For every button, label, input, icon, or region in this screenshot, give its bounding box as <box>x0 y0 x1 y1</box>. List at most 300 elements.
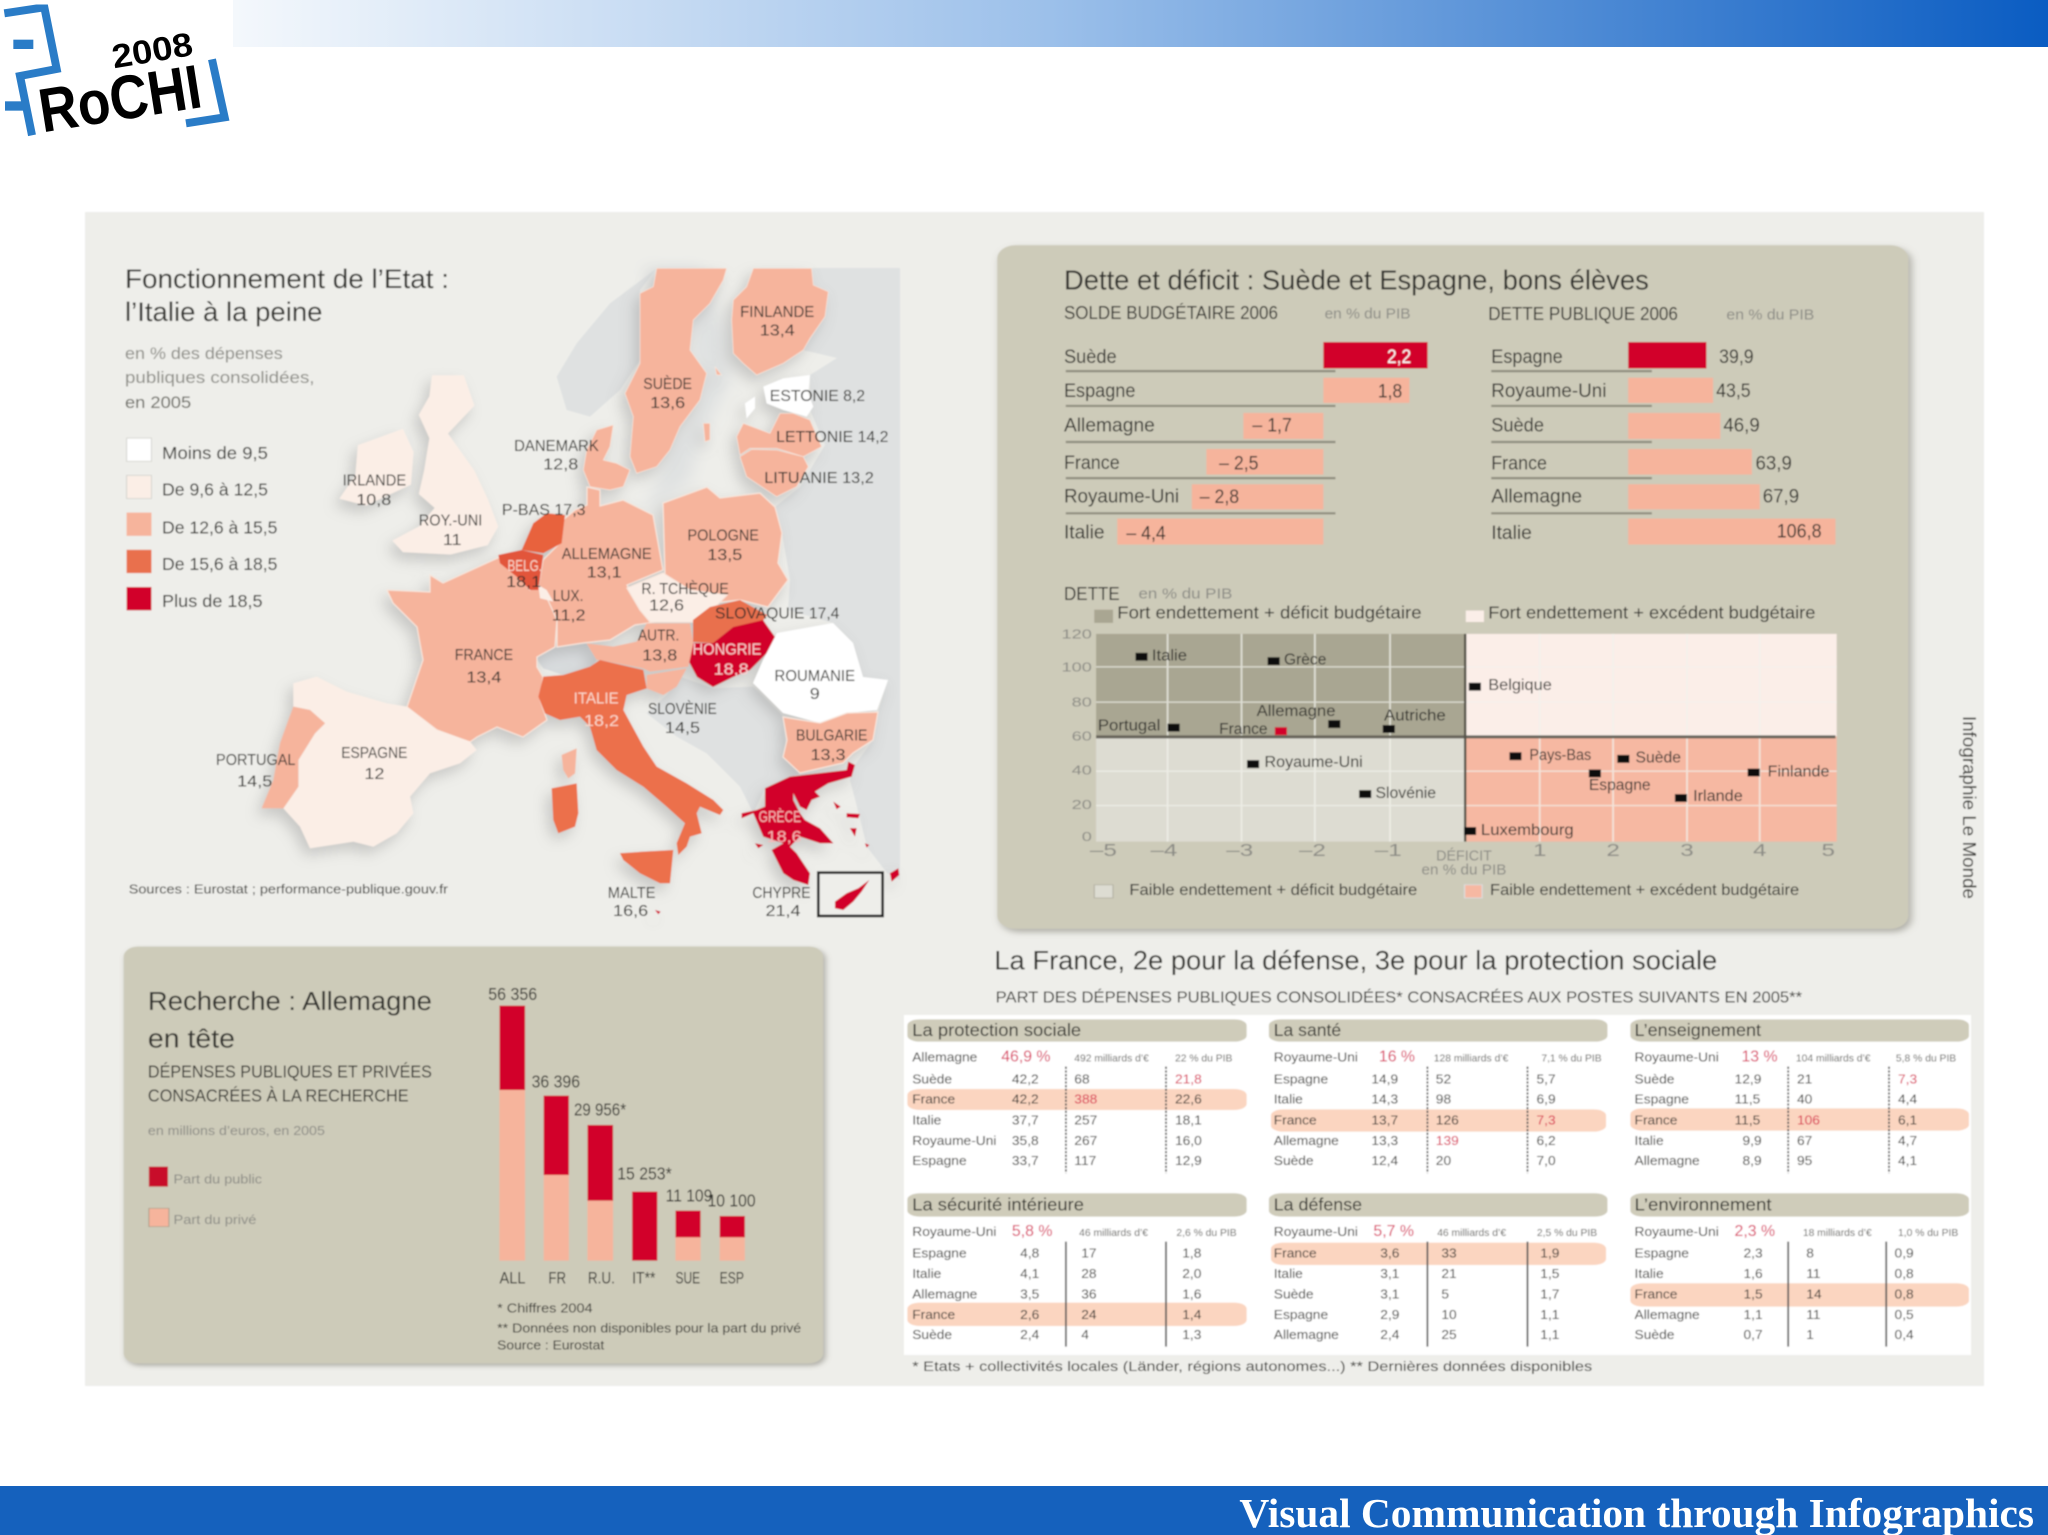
table: La protection sociale: 33,7 <box>1012 1153 1039 1168</box>
scatter plot: dette et déficit: –5 <box>1090 841 1117 860</box>
map legend: De 15,6 à 18,5 <box>162 555 277 575</box>
table: La santé <box>1269 1019 1607 1168</box>
map: country labels: ESPAGNE <box>341 744 407 762</box>
stacked bar chart: research spending: FR <box>548 1269 566 1287</box>
table: L'environnement: 11 <box>1806 1266 1821 1281</box>
table: L'environnement: 0,7 <box>1744 1327 1763 1342</box>
map: country labels: 13,6 <box>650 394 685 412</box>
bar chart: solde budgétaire: – 2,8 <box>1200 486 1239 507</box>
table: La sécurité intérieure: 36 <box>1081 1287 1097 1301</box>
table: L'enseignement: 13 % <box>1741 1049 1778 1066</box>
scatter plot: dette et déficit: Luxembourg <box>1481 822 1574 839</box>
map: country labels: 9 <box>810 685 820 703</box>
scatter plot: dette et déficit: Finlande <box>1768 763 1829 781</box>
map subtitle: publiques consolidées, <box>125 368 315 387</box>
map: country labels: 11 <box>443 531 462 549</box>
scatter plot: dette et déficit: DETTE <box>1064 583 1120 604</box>
table: La santé: Allemagne <box>1274 1133 1339 1148</box>
table: La défense: 1,7 <box>1540 1287 1559 1301</box>
map: country labels: 11,2 <box>552 607 585 624</box>
table: La santé: Italie <box>1274 1092 1303 1106</box>
table: L'enseignement: 4,7 <box>1898 1133 1917 1148</box>
research legend: Part du public <box>174 1172 262 1187</box>
map: country labels: ROUMANIE <box>775 667 855 685</box>
table: La défense: 1,1 <box>1540 1307 1559 1322</box>
table: La défense: 2,5 % du PIB <box>1537 1228 1597 1239</box>
table: La défense: 1,1 <box>1540 1327 1559 1342</box>
table: La protection sociale: 12,9 <box>1175 1153 1202 1168</box>
logo: RoCHI 2008 <box>4 7 225 146</box>
research heading: en tête <box>148 1023 235 1053</box>
table: L'enseignement: 95 <box>1797 1153 1812 1168</box>
table: L'enseignement: 12,9 <box>1735 1072 1761 1086</box>
table: La protection sociale: Espagne <box>912 1153 967 1168</box>
table: L'environnement: 1,5 <box>1744 1287 1763 1301</box>
map: country labels: 13,5 <box>707 546 742 564</box>
table: La protection sociale: France <box>912 1092 955 1106</box>
Iberia <box>262 677 477 848</box>
research legend <box>149 1167 262 1227</box>
table: L'environnement <box>1630 1193 1969 1342</box>
bar chart: dette publique: DETTE PUBLIQUE 2006 <box>1488 303 1678 324</box>
table: L'environnement: 2,3 % <box>1735 1223 1775 1240</box>
table: L'environnement: Royaume-Uni <box>1635 1224 1719 1239</box>
table: La santé: 98 <box>1436 1092 1451 1106</box>
infographic background page <box>85 212 1984 1386</box>
table: La santé: France <box>1274 1113 1317 1127</box>
table: L'environnement: 0,8 <box>1895 1287 1914 1301</box>
table: La sécurité intérieure: Allemagne <box>912 1287 977 1301</box>
map subtitle <box>125 344 315 412</box>
table: L'enseignement: 67 <box>1797 1133 1812 1148</box>
map: country labels: LUX. <box>553 587 583 605</box>
scatter plot: dette et déficit: 5 <box>1821 841 1835 860</box>
table: La santé: 14,3 <box>1371 1092 1398 1106</box>
scatter plot: dette et déficit: Fort endettement + déficit budgétaire <box>1117 604 1422 623</box>
table: L'environnement: 0,4 <box>1895 1327 1914 1342</box>
table: L'enseignement: 21 <box>1797 1072 1812 1086</box>
map legend <box>127 438 277 612</box>
UK and Ireland <box>339 375 498 554</box>
table: L'environnement: 8 <box>1806 1246 1814 1260</box>
map: country labels: 12,6 <box>649 596 684 614</box>
map subtitle: en 2005 <box>125 393 191 412</box>
table: La défense: 10 <box>1441 1307 1457 1322</box>
table: La protection sociale: 35,8 <box>1012 1133 1039 1148</box>
research notes: Source : Eurostat <box>497 1339 605 1353</box>
table: L'enseignement: Allemagne <box>1635 1153 1700 1168</box>
table: L'environnement: 11 <box>1806 1307 1821 1322</box>
table: La défense: 2,4 <box>1380 1327 1400 1342</box>
table: L'environnement: Italie <box>1635 1266 1664 1281</box>
table: La sécurité intérieure: Italie <box>912 1266 941 1281</box>
bar chart: dette publique: Suède <box>1491 414 1544 436</box>
scatter plot: dette et déficit: 1 <box>1533 841 1546 860</box>
research heading: Recherche : Allemagne <box>148 986 432 1016</box>
table: La protection sociale: Allemagne <box>912 1050 977 1065</box>
scatter plot: dette et déficit: 40 <box>1072 764 1092 778</box>
map subtitle: en % des dépenses <box>125 344 283 363</box>
table: La sécurité intérieure: 24 <box>1081 1307 1097 1322</box>
map: country labels: ITALIE <box>574 689 619 707</box>
table: L'enseignement: Italie <box>1635 1133 1664 1148</box>
scatter plot: dette et déficit: DÉFICIT <box>1436 847 1492 864</box>
stacked bar chart: research spending: 56 356 <box>488 985 537 1004</box>
research subtitle: en millions d’euros, en 2005 <box>148 1124 325 1138</box>
scatter plot: dette et déficit: Portugal <box>1098 717 1160 735</box>
map: country labels: 18,6 <box>767 828 802 846</box>
table: La défense: Royaume-Uni <box>1274 1224 1358 1239</box>
table: L'enseignement: 4,1 <box>1898 1153 1917 1168</box>
map: country labels: 13,3 <box>811 746 846 764</box>
table: La défense: Italie <box>1274 1266 1303 1281</box>
table: La santé: 6,2 <box>1537 1133 1556 1148</box>
table: L'enseignement: 5,8 % du PIB <box>1896 1054 1956 1065</box>
table: La sécurité intérieure: 4,8 <box>1020 1246 1039 1260</box>
research notes: * Chiffres 2004 <box>497 1302 593 1316</box>
table: La protection sociale: 117 <box>1074 1153 1096 1168</box>
bar chart: solde budgétaire: Royaume-Uni <box>1064 485 1179 506</box>
map: country labels: P-BAS 17,3 <box>502 501 586 519</box>
scatter plot: dette et déficit: 120 <box>1061 627 1092 642</box>
table: La défense: 21 <box>1441 1266 1457 1281</box>
table: La santé: Royaume-Uni <box>1274 1050 1358 1065</box>
table: L'environnement: 0,8 <box>1895 1266 1914 1281</box>
table: La sécurité intérieure: La sécurité intérieure <box>912 1195 1084 1215</box>
scatter plot: dette et déficit: Belgique <box>1488 677 1552 694</box>
bar chart: dette publique: 106,8 <box>1777 520 1822 542</box>
stacked bar chart: research spending <box>488 985 756 1287</box>
scatter plot: dette et déficit: 80 <box>1072 696 1092 710</box>
research legend: Part du privé <box>174 1212 256 1227</box>
countries centre <box>387 487 888 773</box>
map: country labels: PORTUGAL <box>216 751 295 769</box>
map: country labels: CHYPRE <box>752 884 811 902</box>
map: country labels: 13,4 <box>466 668 501 686</box>
stacked bar chart: research spending: 36 396 <box>532 1073 580 1092</box>
table: La sécurité intérieure: 1,4 <box>1182 1307 1202 1322</box>
table: La protection sociale: 18,1 <box>1175 1113 1202 1127</box>
research subtitle <box>148 1063 432 1138</box>
table: La santé: 139 <box>1436 1133 1459 1148</box>
table: L'environnement: Espagne <box>1635 1246 1689 1260</box>
table: La défense: 3,1 <box>1380 1287 1399 1301</box>
table: La protection sociale: 37,7 <box>1012 1113 1039 1127</box>
bar chart: solde budgétaire: Espagne <box>1064 380 1135 401</box>
table: La sécurité intérieure: 4 <box>1081 1327 1089 1342</box>
bar chart: solde budgétaire: 1,8 <box>1378 380 1402 402</box>
bar chart: dette publique: Royaume-Uni <box>1491 380 1606 401</box>
stacked bar chart: research spending: R.U. <box>588 1269 615 1287</box>
map legend: De 9,6 à 12,5 <box>162 480 268 500</box>
table: La protection sociale <box>907 1019 1247 1168</box>
table: La protection sociale: 492 milliards d’€ <box>1074 1054 1149 1065</box>
table: La santé: 7,1 % du PIB <box>1541 1054 1602 1065</box>
bar chart: solde budgétaire: France <box>1064 451 1120 473</box>
table: L'enseignement: 104 milliards d’€ <box>1796 1054 1871 1065</box>
stacked bar chart: research spending: SUE <box>675 1269 700 1287</box>
footer title: Visual Communication through Infographics <box>1239 1490 2034 1535</box>
map: country labels: FRANCE <box>455 646 513 664</box>
bar chart: solde budgétaire: – 2,5 <box>1219 452 1259 474</box>
table: La santé: 13,3 <box>1371 1133 1398 1148</box>
stacked bar chart: research spending: ESP <box>720 1269 744 1287</box>
map legend: De 12,6 à 15,5 <box>162 519 277 538</box>
table: La protection sociale: 22,6 <box>1175 1092 1202 1106</box>
table: La sécurité intérieure: 2,6 <box>1020 1307 1039 1322</box>
table: La sécurité intérieure: France <box>912 1307 955 1322</box>
table: L'environnement: 1,1 <box>1744 1307 1763 1322</box>
table: La protection sociale: 21,8 <box>1175 1072 1202 1086</box>
table: La protection sociale: 68 <box>1074 1072 1090 1086</box>
map: country labels: ALLEMAGNE <box>562 545 652 563</box>
table: La défense: 1,9 <box>1540 1246 1559 1260</box>
table: La protection sociale: 46,9 % <box>1001 1049 1051 1066</box>
table: La défense: La défense <box>1274 1195 1362 1215</box>
table: La santé: 128 milliards d’€ <box>1434 1054 1509 1065</box>
research subtitle: DÉPENSES PUBLIQUES ET PRIVÉES <box>148 1063 432 1081</box>
table: L'enseignement <box>1630 1019 1969 1168</box>
bar chart: solde budgétaire: – 4,4 <box>1126 522 1166 543</box>
map: country labels: 13,8 <box>642 647 677 664</box>
table: La santé: 12,4 <box>1371 1153 1399 1168</box>
table: L'enseignement: 4,4 <box>1898 1092 1918 1106</box>
table: L'environnement: France <box>1635 1287 1677 1301</box>
top gradient band <box>233 0 2048 47</box>
table: La santé: 7,3 <box>1537 1113 1556 1127</box>
bar chart: solde budgétaire: SOLDE BUDGÉTAIRE 2006 <box>1064 303 1278 323</box>
table: La santé: La santé <box>1274 1020 1341 1040</box>
Italy, Austria, Slovenia, Greece <box>538 623 899 914</box>
table: La protection sociale: La protection sociale <box>912 1020 1081 1040</box>
table: L'enseignement: 7,3 <box>1898 1072 1917 1086</box>
scatter plot: dette et déficit: Autriche <box>1384 707 1446 725</box>
stacked bar chart: research spending: 15 253* <box>617 1164 672 1183</box>
map: country labels: FINLANDE <box>740 303 814 321</box>
map: country labels: 14,5 <box>237 772 272 790</box>
map: Cyprus inset <box>818 873 883 916</box>
table: La défense: Espagne <box>1274 1307 1328 1322</box>
scatter plot: dette et déficit: –3 <box>1226 841 1253 860</box>
panel: Dette et déficit <box>997 245 1908 929</box>
table: La défense: 3,1 <box>1380 1266 1399 1281</box>
table: La défense <box>1269 1193 1607 1342</box>
table: La sécurité intérieure: Espagne <box>912 1246 967 1260</box>
table: La santé: 13,7 <box>1371 1113 1398 1127</box>
table: La protection sociale: 16,0 <box>1175 1133 1202 1148</box>
map: country labels: 18,8 <box>714 661 749 678</box>
table: La défense: 2,9 <box>1380 1307 1399 1322</box>
map: country labels: HONGRIE <box>693 641 761 658</box>
scatter plot: dette et déficit: en % du PIB <box>1422 861 1506 878</box>
stacked bar chart: research spending: 11 109 <box>666 1187 712 1206</box>
table: La santé: Espagne <box>1274 1072 1328 1086</box>
table: La défense: 1,5 <box>1540 1266 1559 1281</box>
research notes <box>497 1302 801 1353</box>
table: La santé: 20 <box>1436 1153 1451 1168</box>
scatter plot: dette et déficit: Allemagne <box>1257 703 1335 720</box>
scatter plot: dette et déficit: 20 <box>1072 798 1092 812</box>
scatter plot: dette et déficit <box>1061 583 1837 899</box>
map sources: Sources : Eurostat ; performance-publique.gouv.fr <box>129 881 448 896</box>
map: country labels: ESTONIE 8,2 <box>770 387 865 405</box>
map text layer (heading, legend, labels) <box>125 265 888 920</box>
table: L'environnement: 2,3 <box>1744 1246 1763 1260</box>
table: L'enseignement: 6,1 <box>1898 1113 1917 1127</box>
table: La santé: 16 % <box>1379 1049 1415 1066</box>
table: La protection sociale: 267 <box>1074 1133 1097 1148</box>
table: La sécurité intérieure: Royaume-Uni <box>912 1224 996 1239</box>
panel: Recherche <box>124 947 823 1363</box>
bar chart: solde budgétaire: – 1,7 <box>1252 414 1292 436</box>
map: EU countries <box>262 268 899 914</box>
table: L'enseignement: France <box>1635 1113 1677 1127</box>
table: La protection sociale: Italie <box>912 1113 941 1127</box>
map: country labels: LITUANIE 13,2 <box>764 469 874 487</box>
map legend: Moins de 9,5 <box>162 444 268 464</box>
table: La défense: Allemagne <box>1274 1327 1339 1342</box>
bar chart: dette publique: 63,9 <box>1756 452 1792 473</box>
table: L'environnement: 1 <box>1806 1327 1814 1342</box>
table: La sécurité intérieure: 3,5 <box>1020 1287 1039 1301</box>
bar chart: solde budgétaire: Suède <box>1064 346 1117 367</box>
table: L'enseignement: Royaume-Uni <box>1635 1050 1719 1065</box>
scatter plot: dette et déficit: Grèce <box>1284 651 1326 669</box>
table: La santé: 14,9 <box>1371 1072 1398 1086</box>
bar chart: dette publique: France <box>1491 452 1547 473</box>
stacked bar chart: research spending: IT** <box>632 1269 656 1287</box>
map: country labels: BULGARIE <box>796 727 867 744</box>
scatter plot: dette et déficit: 4 <box>1753 841 1767 860</box>
map: country labels: 21,4 <box>766 902 801 920</box>
debt heading: Dette et déficit : Suède et Espagne, bons élèves <box>1064 264 1649 296</box>
map: country labels: 13,4 <box>760 322 795 339</box>
bar chart: dette publique: 67,9 <box>1763 485 1799 507</box>
table: La protection sociale: 257 <box>1074 1113 1097 1127</box>
scatter plot: dette et déficit: Espagne <box>1589 777 1651 794</box>
table: La défense: France <box>1274 1246 1317 1260</box>
table: La sécurité intérieure: 46 milliards d’€ <box>1079 1228 1148 1239</box>
bar chart: dette publique: 46,9 <box>1723 414 1760 436</box>
table: La santé: 7,0 <box>1537 1153 1556 1168</box>
logo: RoCHI 2008: 2008 <box>109 26 196 76</box>
table: La santé: 126 <box>1436 1113 1459 1127</box>
table: La santé: 5,7 <box>1537 1072 1556 1086</box>
scatter plot: dette et déficit: 2 <box>1606 841 1620 860</box>
bar chart: dette publique: Espagne <box>1491 346 1563 367</box>
map: country labels: SLOVÈNIE <box>648 700 717 718</box>
scatter plot: dette et déficit: 60 <box>1072 730 1092 744</box>
table: L'environnement: Suède <box>1635 1327 1674 1342</box>
map heading: Fonctionnement de l’Etat : <box>125 265 449 295</box>
bar chart: solde budgétaire: Allemagne <box>1064 414 1155 436</box>
map: country labels: BELG. <box>507 557 542 574</box>
table: La sécurité intérieure: 2,4 <box>1020 1327 1040 1342</box>
table: La sécurité intérieure: Suède <box>912 1327 952 1342</box>
scatter plot: dette et déficit: en % du PIB <box>1138 585 1232 602</box>
table: La santé: 52 <box>1436 1072 1451 1086</box>
map: country labels: MALTE <box>608 884 655 902</box>
map: country labels: 10,8 <box>356 491 391 509</box>
map: country labels: DANEMARK <box>514 437 599 455</box>
table: La défense: 46 milliards d’€ <box>1437 1228 1506 1239</box>
table: L'environnement: Allemagne <box>1635 1307 1700 1322</box>
table: L'environnement: 1,0 % du PIB <box>1898 1228 1959 1239</box>
scatter plot: dette et déficit: 100 <box>1061 660 1092 675</box>
bar chart: dette publique: 43,5 <box>1716 380 1751 401</box>
table: La santé: 6,9 <box>1537 1092 1556 1106</box>
scatter plot: dette et déficit: Faible endettement + déficit budgétaire <box>1129 882 1417 899</box>
scatter plot: dette et déficit: 0 <box>1082 830 1092 845</box>
countries north (Scandinavia, Baltics, Benelux) <box>583 268 828 497</box>
table: L'environnement: 1,6 <box>1744 1266 1763 1281</box>
bar chart: solde budgétaire: 2,2 <box>1387 346 1411 367</box>
table: La sécurité intérieure: 28 <box>1081 1266 1097 1281</box>
map heading <box>125 265 449 327</box>
table: L'environnement: 14 <box>1806 1287 1822 1301</box>
scatter plot: dette et déficit: –4 <box>1150 841 1178 860</box>
table: L'enseignement: 8,9 <box>1742 1153 1762 1168</box>
stacked bar chart: research spending: 29 956* <box>574 1101 626 1120</box>
map legend: Plus de 18,5 <box>162 592 263 612</box>
map: country labels: IRLANDE <box>343 472 406 489</box>
table: La défense: 3,6 <box>1380 1246 1399 1260</box>
scatter plot: dette et déficit: –2 <box>1299 841 1326 860</box>
map: country labels <box>216 303 888 920</box>
table: La défense: 25 <box>1441 1327 1457 1342</box>
research heading <box>148 986 432 1053</box>
bar chart: solde budgétaire <box>1064 303 1428 545</box>
map: country labels: R. TCHÈQUE <box>641 580 729 598</box>
table: La protection sociale: 42,2 <box>1012 1072 1039 1086</box>
table: La défense: 5 <box>1441 1287 1449 1301</box>
bar chart: solde budgétaire: Italie <box>1064 521 1105 543</box>
map heading: l’Italie à la peine <box>125 297 322 327</box>
scatter plot: dette et déficit: 3 <box>1680 841 1694 860</box>
map: country labels: POLOGNE <box>687 526 759 544</box>
table: La protection sociale: 22 % du PIB <box>1175 1054 1233 1065</box>
map: country labels: LETTONIE 14,2 <box>776 428 888 446</box>
table: La santé: Suède <box>1274 1153 1314 1168</box>
table: La protection sociale: Royaume-Uni <box>912 1133 996 1148</box>
table: La protection sociale: 388 <box>1074 1092 1097 1106</box>
table: La sécurité intérieure: 2,0 <box>1182 1266 1201 1281</box>
table: La protection sociale: Suède <box>912 1072 952 1086</box>
scatter plot: dette et déficit: –1 <box>1375 841 1402 860</box>
table: L'enseignement: 106 <box>1797 1113 1820 1127</box>
scatter plot: dette et déficit: Fort endettement + excédent budgétaire <box>1488 604 1816 623</box>
map: country labels: 14,5 <box>665 719 700 736</box>
research notes: ** Données non disponibles pour la part du privé <box>497 1322 801 1336</box>
map: country labels: SLOVAQUIE 17,4 <box>715 605 839 622</box>
scatter plot: dette et déficit: Pays-Bas <box>1529 747 1591 764</box>
map: country labels: SUÈDE <box>643 375 692 393</box>
scatter plot: dette et déficit: Royaume-Uni <box>1265 754 1363 771</box>
scatter plot: dette et déficit: France <box>1219 720 1268 738</box>
bottom footer bar <box>0 1486 2048 1535</box>
table: L'environnement: 0,9 <box>1895 1246 1914 1260</box>
logo: RoCHI 2008: RoCHI <box>34 52 206 146</box>
table: L'environnement: 18 milliards d’€ <box>1803 1228 1872 1239</box>
table: L'enseignement: L’enseignement <box>1635 1020 1761 1040</box>
map: neighbouring land <box>535 268 900 880</box>
map: country labels: 12,8 <box>543 456 578 473</box>
table: L'environnement: L’environnement <box>1635 1195 1772 1215</box>
stacked bar chart: research spending: ALL <box>499 1269 526 1287</box>
map: country labels: AUTR. <box>638 627 679 644</box>
table: La sécurité intérieure: 4,1 <box>1020 1266 1039 1281</box>
table: L'enseignement: 11,5 <box>1735 1092 1760 1106</box>
